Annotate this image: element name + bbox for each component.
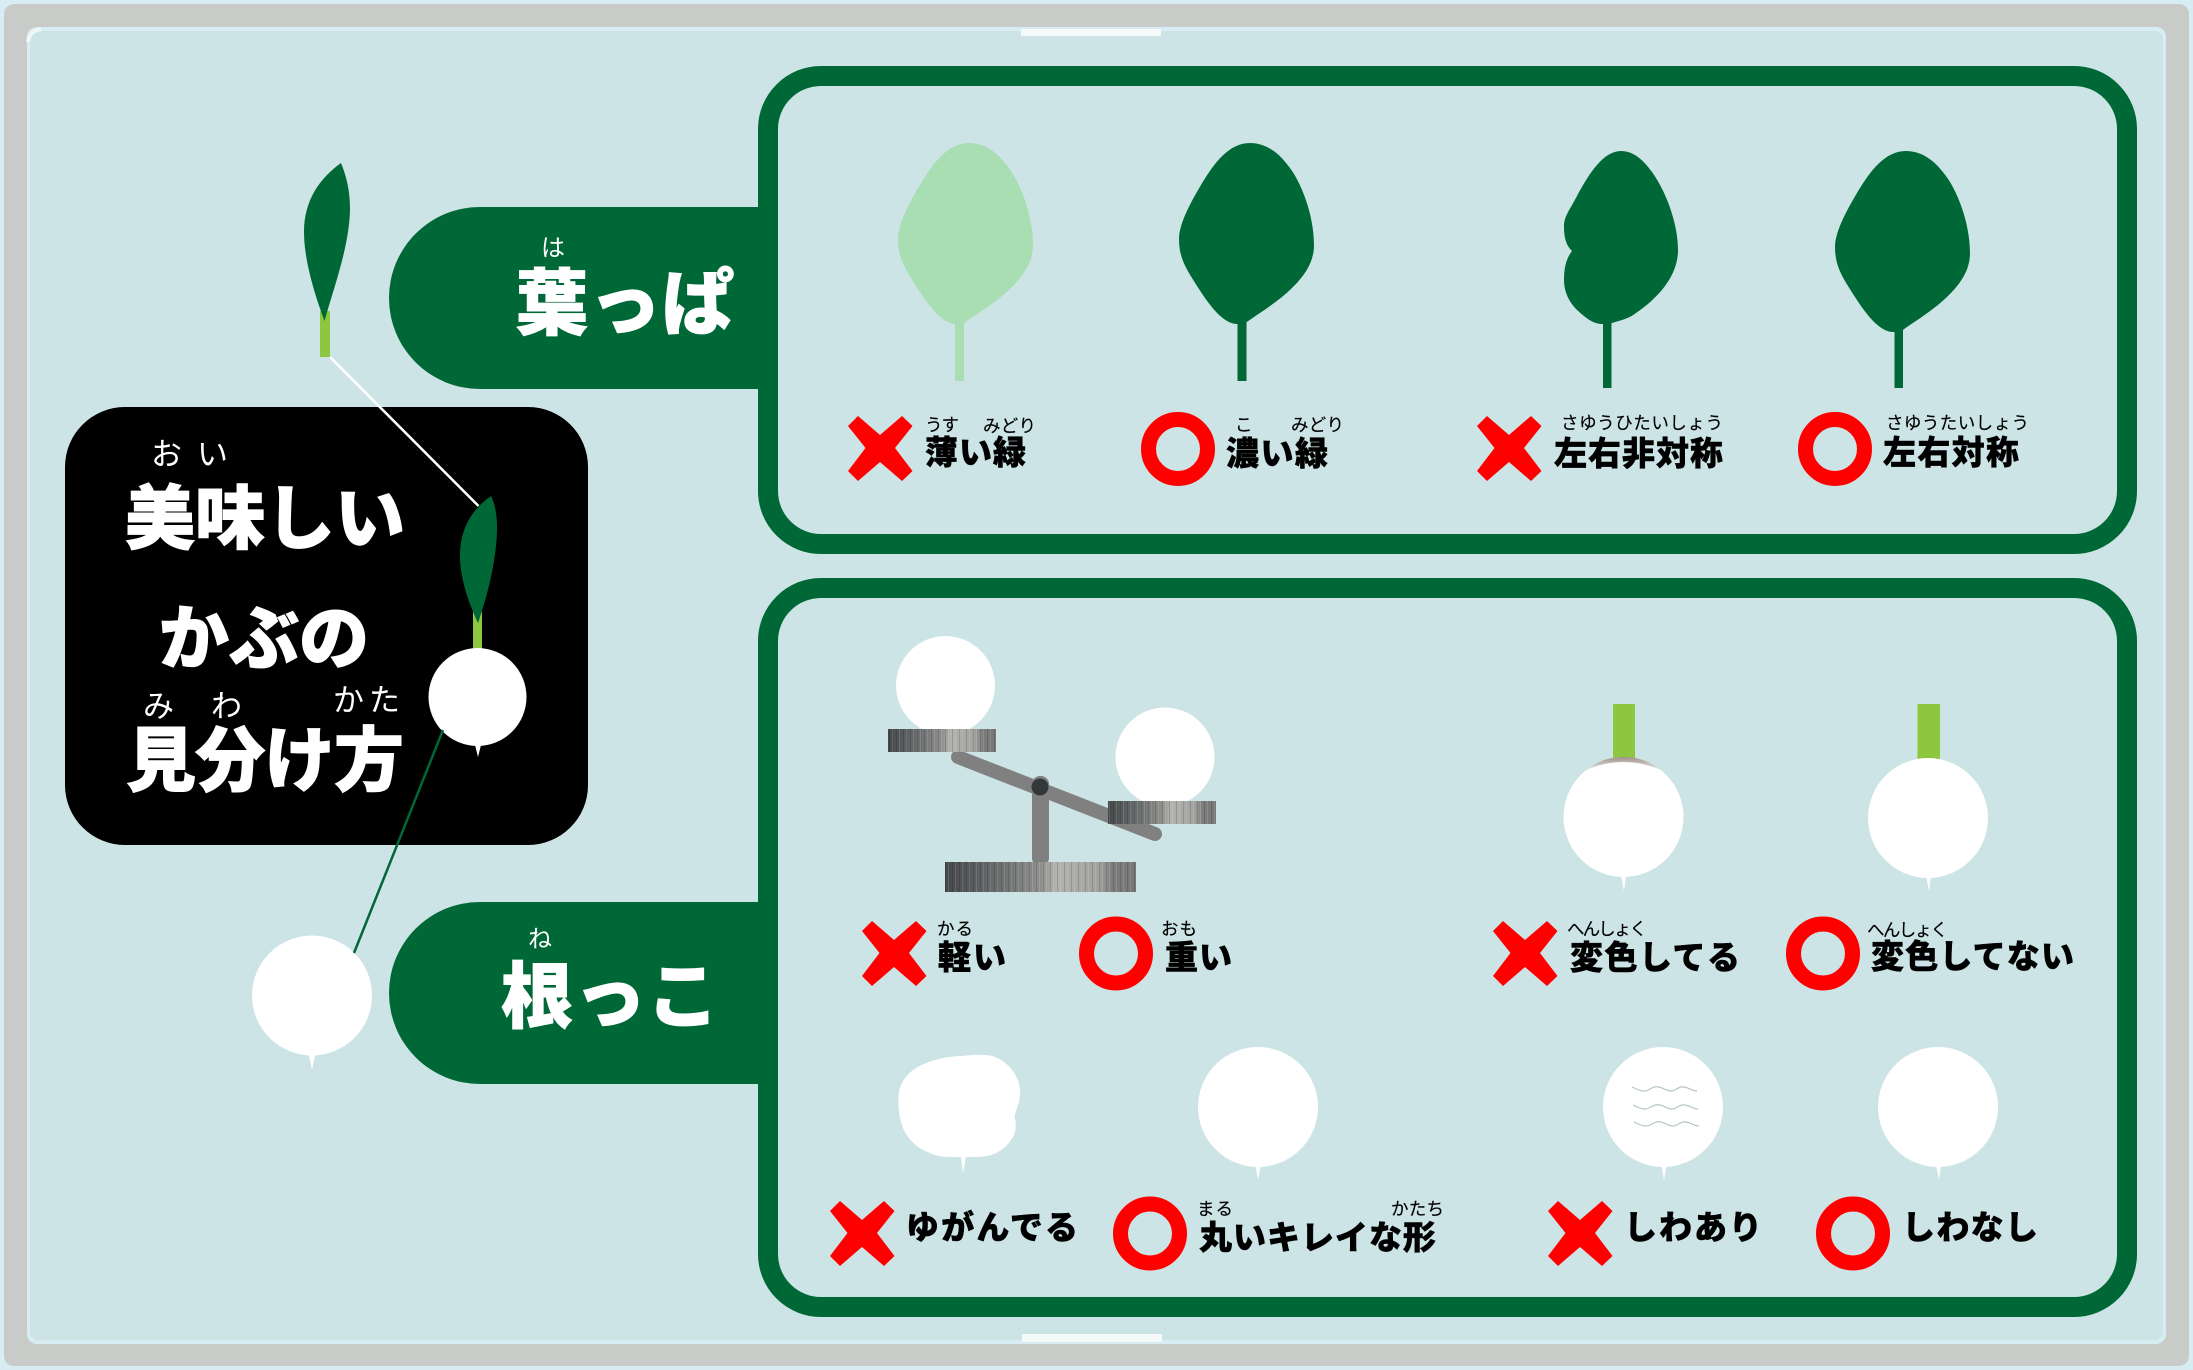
item: balance scale weight comparison	[888, 636, 1216, 892]
panel: title card	[65, 407, 588, 845]
heading tab: 葉っぱ	[389, 207, 768, 389]
title line: 見分け方: かた	[333, 683, 400, 718]
label: light	[862, 919, 1006, 986]
title line: 見分け方: み	[143, 689, 174, 724]
item: light green leaf: 薄い緑	[925, 434, 1026, 471]
item: misshapen turnip: ゆがんでる	[906, 1209, 1078, 1246]
item: wrinkled turnip: しわあり	[1624, 1209, 1762, 1246]
item: wrinkled turnip	[1548, 1047, 1762, 1266]
heading tab: 葉っぱ: 葉っぱ	[516, 265, 734, 345]
arrow: line from leaf to turnip	[330, 357, 478, 506]
item: round turnip: かたち	[1391, 1199, 1444, 1219]
item: dark green leaf: 濃い緑	[1226, 435, 1328, 472]
label: heavy: おも	[1161, 919, 1197, 939]
heading tab: 根っこ	[389, 902, 768, 1084]
item: round turnip: まる	[1197, 1199, 1233, 1219]
title line: 美味しい: い	[197, 437, 228, 472]
arrow: line from root to turnip	[354, 730, 443, 953]
item: symmetrical leaf: 左右対称	[1883, 434, 2019, 471]
item: discoloured turnip: 変色してる	[1570, 939, 1740, 976]
item: round turnip	[1120, 1047, 1444, 1263]
item: undiscoloured turnip	[1794, 704, 2074, 983]
item: asymmetrical leaf: さゆうひたいしょう	[1561, 413, 1723, 433]
label: light: 軽い	[938, 939, 1006, 976]
heading tab: 葉っぱ: は	[541, 235, 565, 262]
panel: leaves	[389, 76, 2127, 544]
item: asymmetrical leaf: 左右非対称	[1554, 435, 1723, 472]
item: dark green leaf	[1148, 143, 1344, 478]
item: light green leaf	[848, 143, 1036, 481]
item: dark green leaf: こ	[1235, 415, 1252, 435]
item: light green leaf: みどり	[983, 416, 1036, 436]
title line: 見分け方	[126, 683, 404, 800]
item: misshapen turnip	[830, 1055, 1078, 1266]
item: discoloured turnip	[1493, 704, 1740, 986]
panel: roots	[389, 588, 2127, 1307]
item: undiscoloured turnip: へんしょく	[1867, 920, 1948, 940]
title line: 美味しい: お	[151, 437, 182, 472]
title line: 美味しい: 美味しい	[125, 480, 405, 558]
title line: 見分け方: 見分け方	[126, 722, 404, 800]
label: heavy: 重い	[1165, 939, 1232, 976]
item: light green leaf: うす	[925, 415, 959, 435]
item: undiscoloured turnip: 変色してない	[1871, 938, 2074, 975]
icon: detached root	[252, 936, 372, 1070]
title line: かぶの: かぶの	[159, 600, 369, 678]
item: symmetrical leaf	[1806, 151, 2029, 478]
icon: detached leaf	[304, 163, 350, 357]
item: symmetrical leaf: さゆうたいしょう	[1886, 413, 2029, 433]
title line: 美味しい	[125, 437, 405, 558]
title line: 見分け方: わ	[211, 689, 242, 724]
label: light: かる	[937, 919, 973, 939]
item: smooth turnip: しわなし	[1902, 1209, 2038, 1246]
item: asymmetrical leaf	[1477, 151, 1723, 481]
label: heavy	[1086, 919, 1232, 983]
item: smooth turnip	[1824, 1047, 2038, 1263]
icon: whole turnip in title card	[428, 496, 526, 757]
item: dark green leaf: みどり	[1291, 415, 1344, 435]
item: discoloured turnip: へんしょく	[1567, 919, 1647, 939]
heading tab: 根っこ: 根っこ	[501, 958, 719, 1038]
heading tab: 根っこ: ね	[528, 926, 552, 953]
item: round turnip: 丸いキレイな形	[1199, 1219, 1436, 1256]
